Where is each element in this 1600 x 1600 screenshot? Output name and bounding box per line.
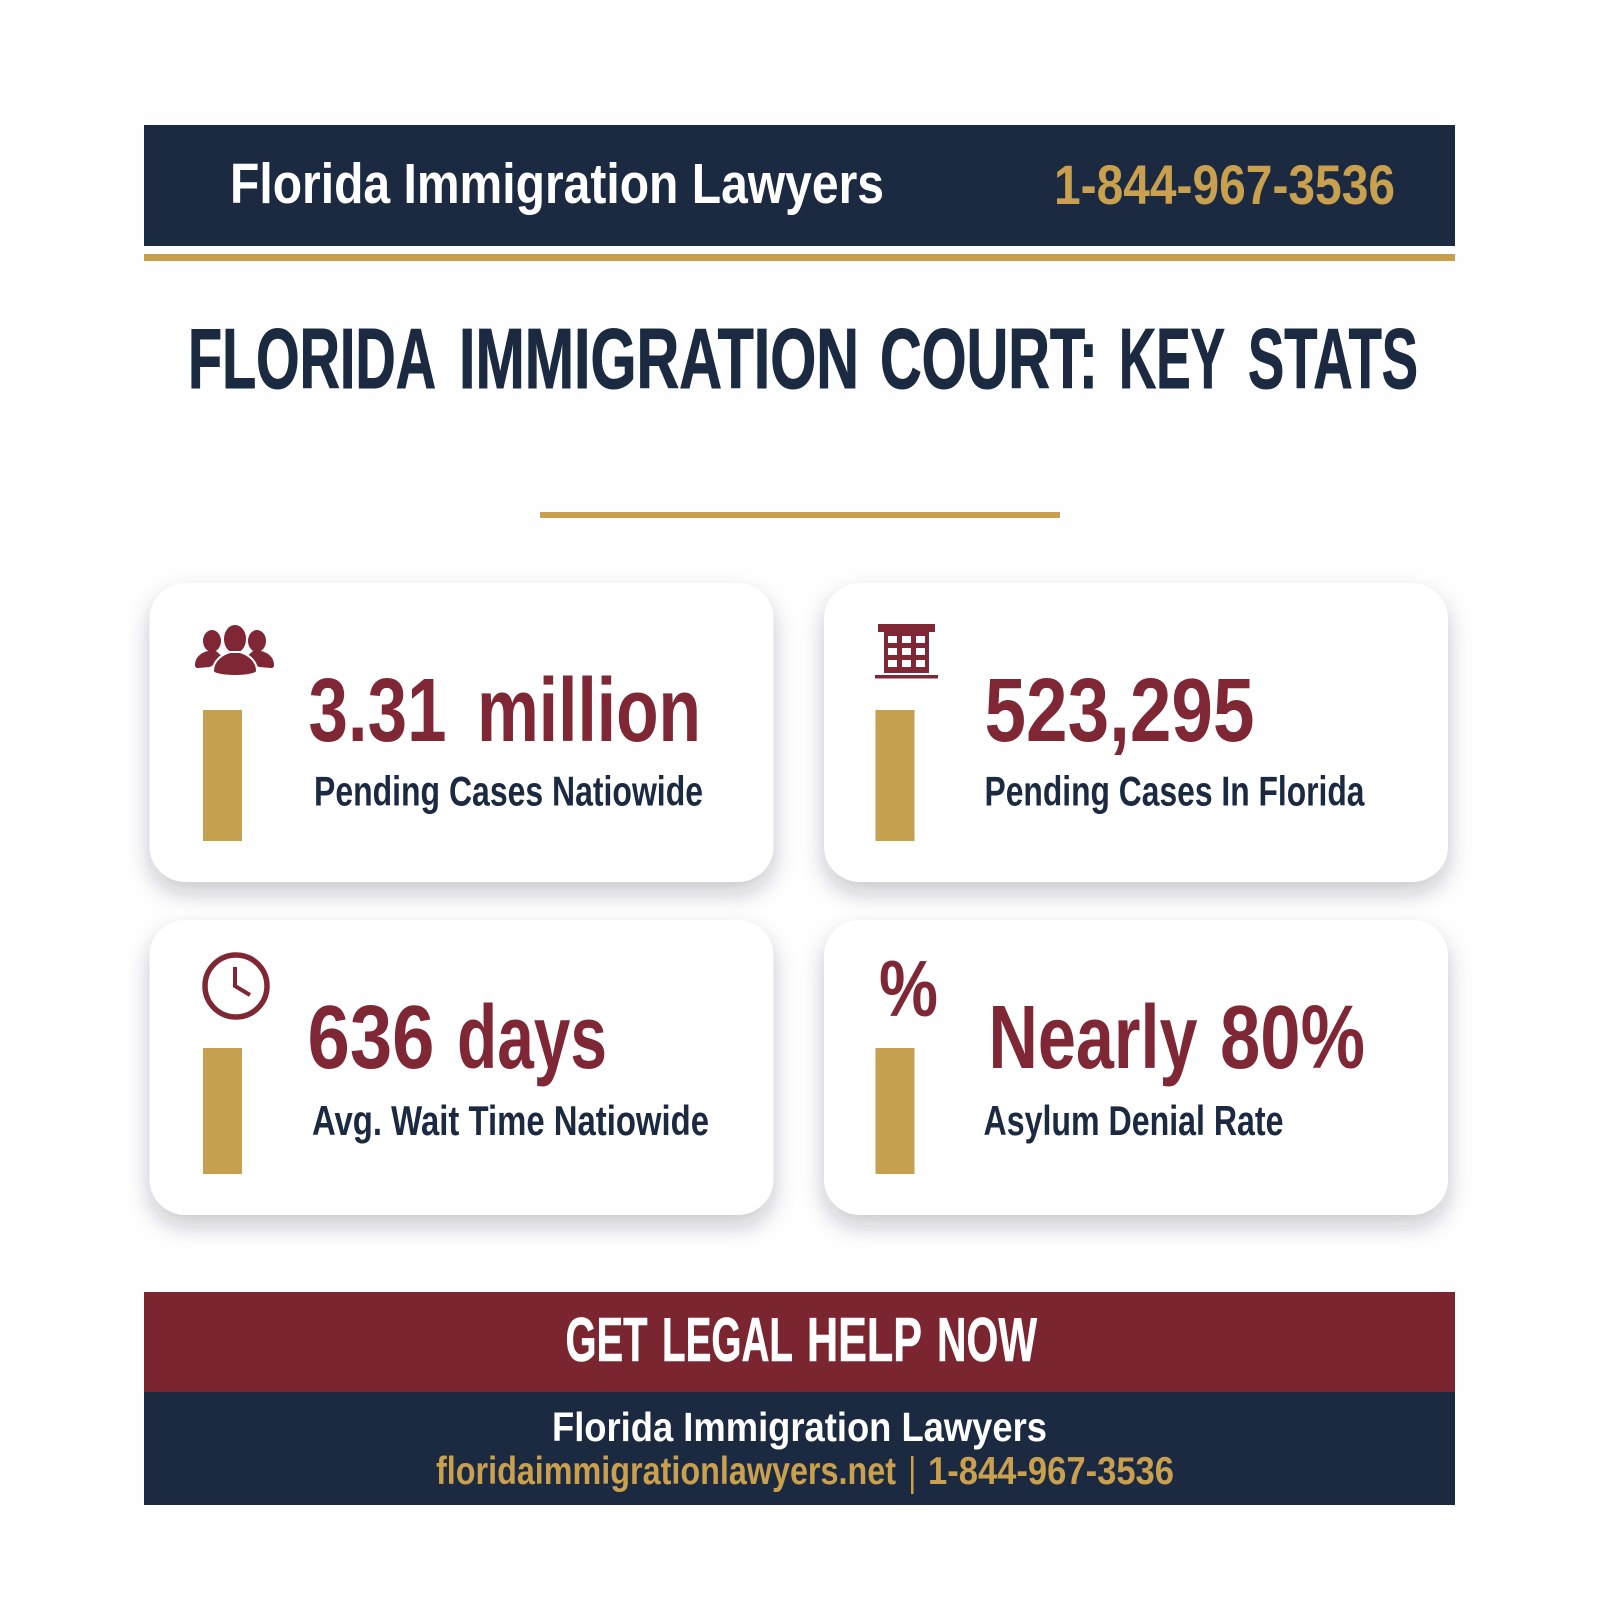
- stat value: days: [457, 988, 607, 1088]
- title: KEY: [1119, 312, 1225, 407]
- panel: asylum denial rate: [824, 920, 1448, 1215]
- icon: percent sign: %: [879, 944, 938, 1033]
- stat label: Asylum Denial Rate: [984, 1097, 1284, 1144]
- title: COURT:: [880, 312, 1098, 407]
- stat value: [308, 988, 607, 1088]
- stat value: Nearly: [988, 988, 1198, 1088]
- call to action banner: [144, 1292, 1455, 1392]
- stat value: 523,295: [984, 661, 1254, 761]
- footer website and phone: floridaimmigrationlawyers.net: [436, 1450, 896, 1493]
- header firm name: Florida Immigration Lawyers: [230, 152, 884, 216]
- gold bar: [876, 1048, 914, 1174]
- stat label: Pending Cases Natiowide: [314, 768, 703, 814]
- icon: group of people: [195, 624, 274, 676]
- header banner: [144, 125, 1455, 246]
- call to action text: [566, 1306, 1037, 1375]
- header gold rule: [144, 254, 1455, 261]
- stat value: 3.31: [308, 661, 446, 761]
- gold bar: [876, 710, 914, 841]
- panel: pending cases nationwide: [150, 583, 774, 882]
- gold bar: [203, 710, 242, 841]
- icon: courthouse building: [875, 624, 938, 678]
- call to action text: HELP: [807, 1306, 922, 1375]
- call to action text: GET: [566, 1306, 648, 1375]
- title: STATS: [1248, 312, 1418, 407]
- call to action text: NOW: [937, 1306, 1037, 1375]
- title: IMMIGRATION: [459, 312, 859, 407]
- call to action text: LEGAL: [662, 1306, 793, 1375]
- stat value: [308, 661, 701, 761]
- footer contact block: [144, 1392, 1455, 1505]
- footer website and phone: 1-844-967-3536: [928, 1450, 1174, 1493]
- icon: clock: [205, 955, 267, 1017]
- header phone number: 1-844-967-3536: [1054, 153, 1395, 216]
- footer firm name: Florida Immigration Lawyers: [552, 1404, 1047, 1450]
- panel: average wait time: [150, 920, 774, 1215]
- panel: pending cases in florida: [824, 583, 1448, 882]
- title: FLORIDA: [188, 312, 436, 407]
- stat label: Pending Cases In Florida: [984, 768, 1365, 814]
- gold bar: [203, 1048, 242, 1174]
- title gold divider: [540, 512, 1060, 518]
- title: [188, 312, 1418, 407]
- stat value: 636: [308, 988, 434, 1088]
- stat value: 80%: [1220, 988, 1365, 1088]
- stat label: Avg. Wait Time Natiowide: [312, 1097, 709, 1144]
- stat value: million: [477, 661, 701, 761]
